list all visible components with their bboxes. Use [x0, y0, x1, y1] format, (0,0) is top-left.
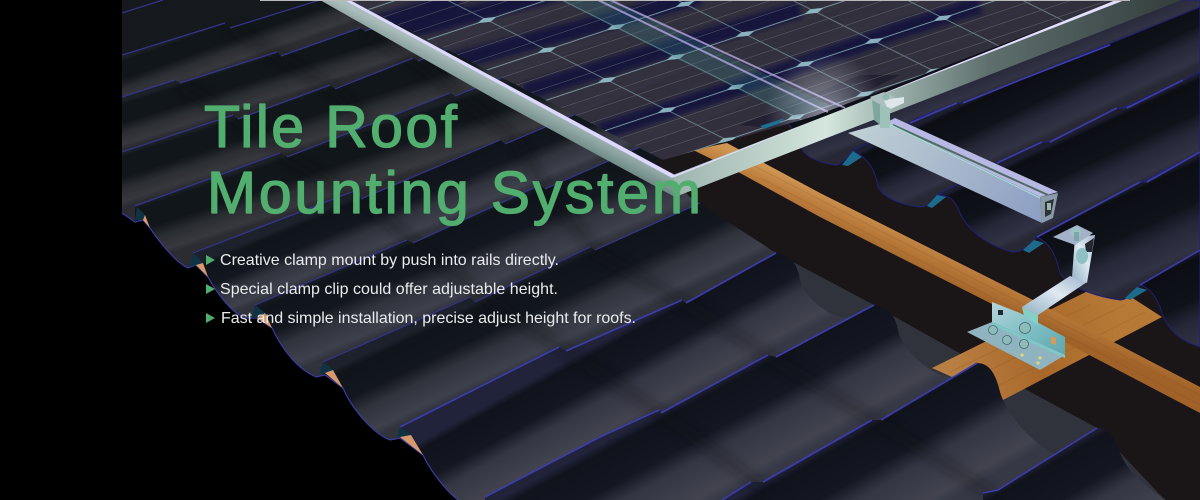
lower tile course: [400, 253, 1166, 500]
title: Tile Roof: [204, 94, 458, 160]
L-hook bracket: [967, 225, 1095, 370]
mounting rail: [848, 118, 1058, 223]
roof edge outline: [122, 213, 458, 500]
rail clamp: [870, 92, 904, 128]
bullet list: Creative clamp mount by push into rails directly.: [220, 252, 559, 269]
wooden cross batten: [932, 285, 1162, 400]
bullet list: Special clamp clip could offer adjustable height.: [220, 281, 558, 298]
underlay membrane: [655, 113, 1200, 500]
eave notches with wood ends: [135, 207, 423, 455]
top edge strip: [260, 0, 1130, 1]
upper tile course: [773, 0, 1200, 347]
title: Mounting System: [207, 160, 701, 226]
upper tile ridge highlights: [122, 0, 700, 362]
lower tile ridge highlights: [400, 45, 1200, 500]
bullet list: [206, 252, 636, 327]
wooden roof batten: [693, 143, 1200, 413]
solar panel glass with cells: [352, 1, 1113, 160]
title: [204, 94, 701, 226]
bullet list: Fast and simple installation, precise adjust height for roofs.: [221, 310, 636, 327]
panel frame: [320, 0, 1182, 197]
tile notches, upper course: [842, 151, 1147, 300]
tile joint shadows: [182, 28, 996, 496]
